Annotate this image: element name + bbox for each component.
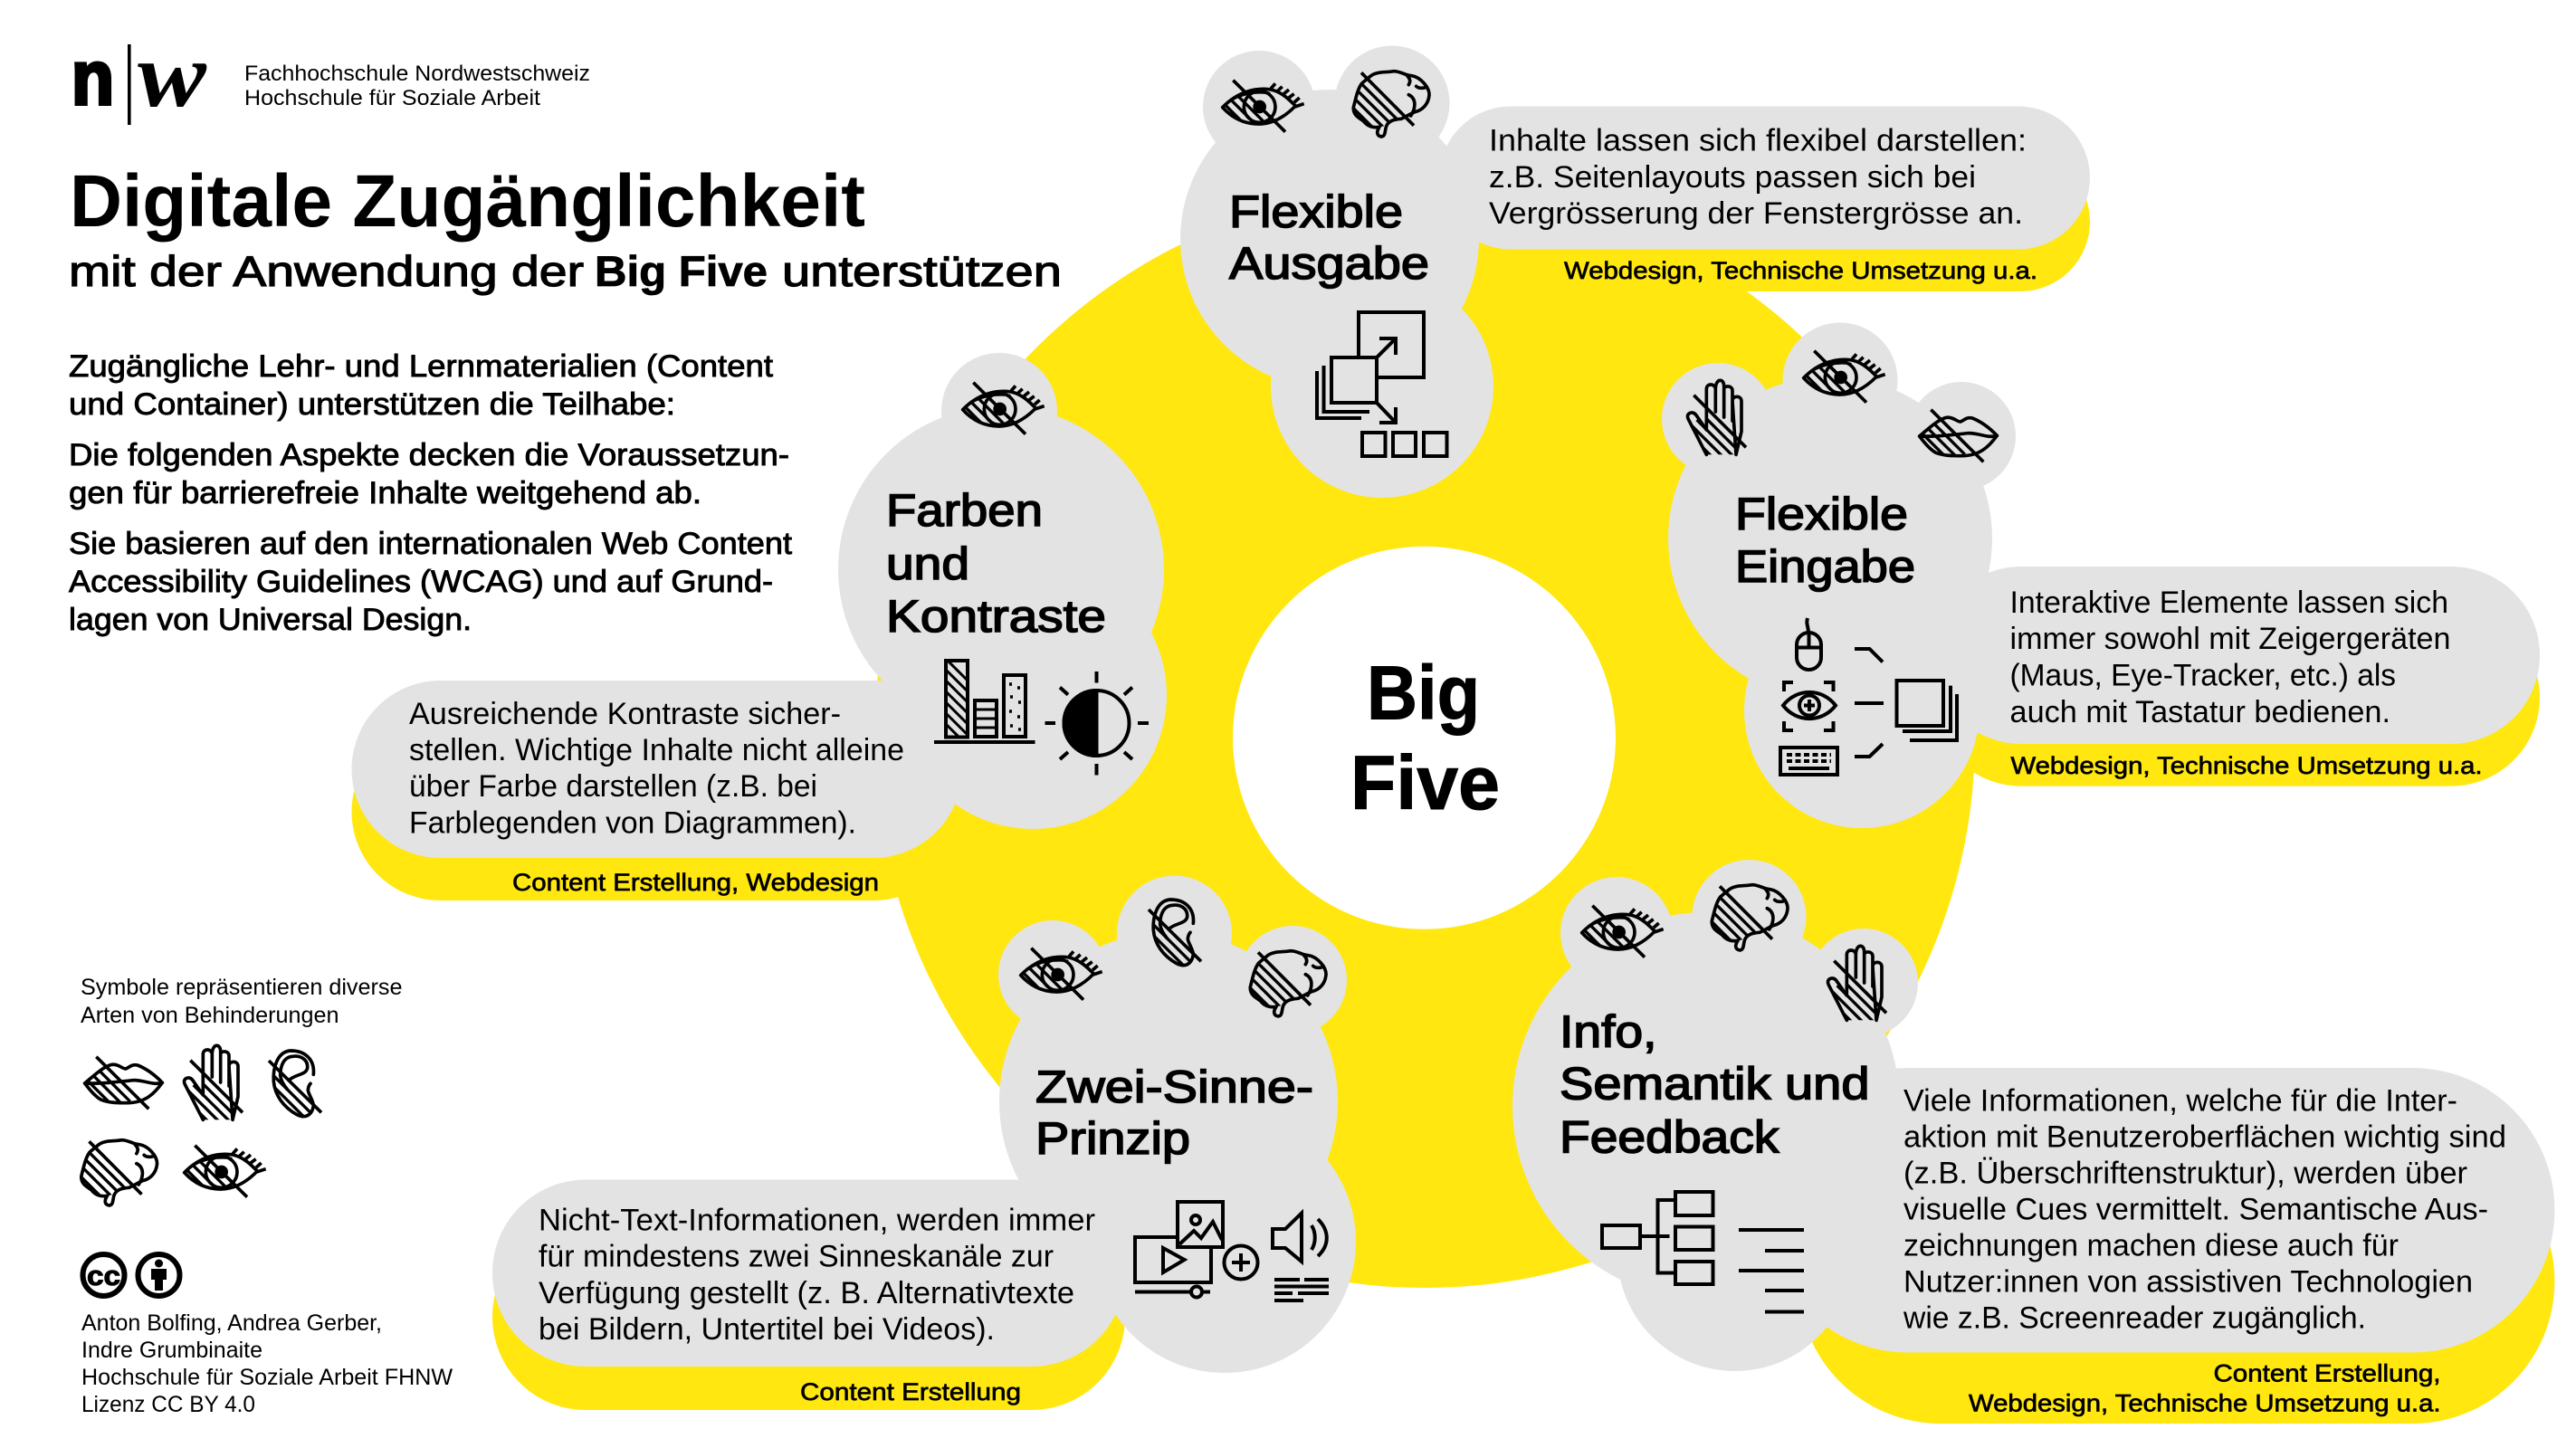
credits: Lizenz CC BY 4.0 xyxy=(81,1392,255,1417)
subtitle: unterstützen xyxy=(782,247,1062,295)
description: Zwei-Sinne-Prinzip xyxy=(539,1204,1095,1347)
icon: brain xyxy=(1340,71,1429,148)
description: Flexible Ausgabe: Vergrösserung der Fenstergrösse an. xyxy=(1489,196,2023,231)
intro text block: Zugängliche Lehr- und Lernmaterialien (Content xyxy=(69,349,774,384)
heading: Farben und Kontraste: und xyxy=(886,538,969,589)
heading: Flexible Ausgabe: Ausgabe xyxy=(1229,238,1429,289)
icon: patterned bar chart xyxy=(934,659,1035,746)
icon: hand xyxy=(1825,946,1888,1041)
icon: Creative Commons CC xyxy=(83,1254,125,1296)
heading: Flexible Eingabe: Flexible xyxy=(1735,489,1908,539)
logo: FHNW: Hochschule für Soziale Arbeit xyxy=(244,86,540,110)
subtitle: Big Five xyxy=(595,247,768,295)
description: Flexible Ausgabe xyxy=(1489,123,2027,231)
description: Info, Semantik und Feedback: (z.B. Überschriftenstruktur), werden über xyxy=(1903,1157,2467,1191)
description: Info, Semantik und Feedback: aktion mit Benutzeroberflächen wichtig sind xyxy=(1903,1120,2506,1155)
icon: ear xyxy=(1142,900,1201,980)
description: Info, Semantik und Feedback: Nutzer:innen von assistiven Technologien xyxy=(1903,1265,2473,1300)
description: Info, Semantik und Feedback: visuelle Cues vermittelt. Semantische Aus- xyxy=(1903,1193,2488,1227)
icon: eye xyxy=(169,1146,266,1212)
intro text block: Accessibility Guidelines (WCAG) und auf Grund- xyxy=(69,565,773,599)
description: Zwei-Sinne-Prinzip: Verfügung gestellt (z. B. Alternativtexte xyxy=(539,1276,1074,1310)
description: Flexible Eingabe xyxy=(2009,586,2451,729)
heading: Farben und Kontraste: Farben xyxy=(886,485,1043,536)
heading: Zwei-Sinne-Prinzip xyxy=(1035,1062,1313,1164)
legend: disability symbols: Arten von Behinderungen xyxy=(81,1003,339,1028)
description: Flexible Eingabe: Interaktive Elemente lassen sich xyxy=(2009,586,2448,620)
centre circle: Big Five: Five xyxy=(1350,740,1500,825)
description: Farben und Kontraste xyxy=(409,697,904,840)
intro text block: gen für barrierefreie Inhalte weitgehend ab. xyxy=(69,476,701,510)
icon: hand xyxy=(1684,380,1748,475)
icon: brain xyxy=(1237,951,1326,1028)
icon: Creative Commons CC: cc xyxy=(87,1260,120,1291)
roles: Farben und Kontraste: Content Erstellung, Webdesign xyxy=(512,869,879,896)
heading: Zwei-Sinne-Prinzip: Zwei-Sinne- xyxy=(1035,1062,1313,1112)
description: Zwei-Sinne-Prinzip: Nicht-Text-Informationen, werden immer xyxy=(539,1204,1095,1238)
description: Zwei-Sinne-Prinzip: für mindestens zwei Sinneskanäle zur xyxy=(539,1240,1054,1274)
icon: brain xyxy=(69,1140,157,1217)
logo: FHNW: w xyxy=(138,24,207,127)
legend: disability symbols xyxy=(63,975,402,1217)
credits: Anton Bolfing, Andrea Gerber, xyxy=(81,1310,382,1336)
roles: Info, Semantik und Feedback: Webdesign, Technische Umsetzung u.a. xyxy=(1969,1390,2440,1417)
description: Info, Semantik und Feedback: zeichnungen machen diese auch für xyxy=(1903,1229,2399,1263)
description: Flexible Ausgabe: z.B. Seitenlayouts passen sich bei xyxy=(1489,160,1976,195)
icon: lips xyxy=(63,1057,162,1109)
credits xyxy=(81,1310,453,1417)
description: Flexible Eingabe: immer sowohl mit Zeigergeräten xyxy=(2009,622,2451,656)
roles: Info, Semantik und Feedback: Content Erstellung, xyxy=(2214,1359,2440,1386)
description: Flexible Ausgabe: Inhalte lassen sich flexibel darstellen: xyxy=(1489,123,2027,157)
heading: Flexible Eingabe xyxy=(1735,489,1915,592)
heading: Zwei-Sinne-Prinzip: Prinzip xyxy=(1035,1113,1190,1164)
icon: input devices xyxy=(1780,618,1957,775)
heading: Info, Semantik und Feedback xyxy=(1560,1006,1870,1162)
intro text block: Sie basieren auf den internationalen Web Content xyxy=(69,527,793,561)
description: Farben und Kontraste: über Farbe darstellen (z.B. bei xyxy=(409,769,817,804)
description: Farben und Kontraste: stellen. Wichtige Inhalte nicht alleine xyxy=(409,733,904,767)
centre circle: Big Five xyxy=(1233,547,1616,929)
heading: Info, Semantik und Feedback: Info, xyxy=(1560,1006,1656,1057)
icon: eye xyxy=(1567,906,1664,972)
roles: Flexible Ausgabe: Webdesign, Technische Umsetzung u.a. xyxy=(1564,257,2037,284)
intro text block xyxy=(69,349,793,637)
icon: brain xyxy=(1699,885,1788,962)
roles: Flexible Eingabe: Webdesign, Technische Umsetzung u.a. xyxy=(2011,752,2482,779)
icon: Creative Commons BY xyxy=(138,1254,179,1296)
heading: Info, Semantik und Feedback: Feedback xyxy=(1560,1111,1780,1162)
subtitle xyxy=(69,247,1062,295)
intro text block: und Container) unterstützen die Teilhabe: xyxy=(69,387,675,422)
heading: Farben und Kontraste xyxy=(886,485,1106,642)
heading: Flexible Ausgabe xyxy=(1229,186,1429,289)
panel: Info, Semantik und Feedback xyxy=(1512,860,2554,1424)
description: Info, Semantik und Feedback: Viele Informationen, welche für die Inter- xyxy=(1903,1084,2457,1119)
icon: lips xyxy=(1898,410,1997,462)
heading: Info, Semantik und Feedback: Semantik und xyxy=(1560,1059,1870,1110)
icon: hierarchy and headings xyxy=(1602,1192,1804,1312)
heading: Flexible Eingabe: Eingabe xyxy=(1735,541,1915,592)
panel: Flexible Ausgabe xyxy=(1180,45,2090,498)
description: Info, Semantik und Feedback: wie z.B. Screenreader zugänglich. xyxy=(1903,1301,2366,1336)
icon: eye xyxy=(1207,81,1304,147)
description: Info, Semantik und Feedback xyxy=(1903,1084,2506,1336)
heading: Flexible Ausgabe: Flexible xyxy=(1229,186,1403,237)
panel: Zwei-Sinne-Prinzip xyxy=(492,876,1356,1410)
icon: eye xyxy=(948,383,1045,449)
icon: eye xyxy=(1789,351,1885,417)
roles: Info, Semantik und Feedback xyxy=(1969,1359,2440,1417)
legend: disability symbols: Symbole repräsentieren diverse xyxy=(81,975,402,1000)
logo: FHNW: Fachhochschule Nordwestschweiz xyxy=(244,62,590,86)
intro text block: Die folgenden Aspekte decken die Voraussetzun- xyxy=(69,438,789,472)
icon: media and audio xyxy=(1135,1202,1329,1300)
credits: Indre Grumbinaite xyxy=(81,1338,262,1363)
panel: Flexible Eingabe xyxy=(1662,322,2540,828)
logo: FHNW xyxy=(72,24,590,127)
icon: responsive layout xyxy=(1317,312,1446,456)
centre circle: Big Five: Big xyxy=(1367,650,1480,735)
title: Digitale Zugänglichkeit xyxy=(70,160,865,243)
logo: FHNW: n xyxy=(72,35,114,120)
roles: Zwei-Sinne-Prinzip: Content Erstellung xyxy=(800,1378,1021,1405)
description: Farben und Kontraste: Ausreichende Kontraste sicher- xyxy=(409,697,841,731)
icon: eye xyxy=(1006,948,1102,1015)
heading: Farben und Kontraste: Kontraste xyxy=(886,591,1106,642)
description: Flexible Eingabe: (Maus, Eye-Tracker, etc.) als xyxy=(2009,659,2396,693)
description: Flexible Eingabe: auch mit Tastatur bedienen. xyxy=(2009,695,2390,729)
icon: contrast sun xyxy=(1045,672,1149,775)
credits: Hochschule für Soziale Arbeit FHNW xyxy=(81,1365,453,1390)
panel: Farben und Kontraste xyxy=(351,353,1167,900)
intro text block: lagen von Universal Design. xyxy=(69,603,472,637)
icon: ear xyxy=(262,1051,321,1131)
icon: hand xyxy=(181,1045,244,1140)
yellow ring xyxy=(874,187,1975,1288)
description: Zwei-Sinne-Prinzip: bei Bildern, Untertitel bei Videos). xyxy=(539,1312,995,1347)
subtitle: mit der Anwendung der xyxy=(69,247,584,295)
description: Farben und Kontraste: Farblegenden von Diagrammen). xyxy=(409,805,856,840)
